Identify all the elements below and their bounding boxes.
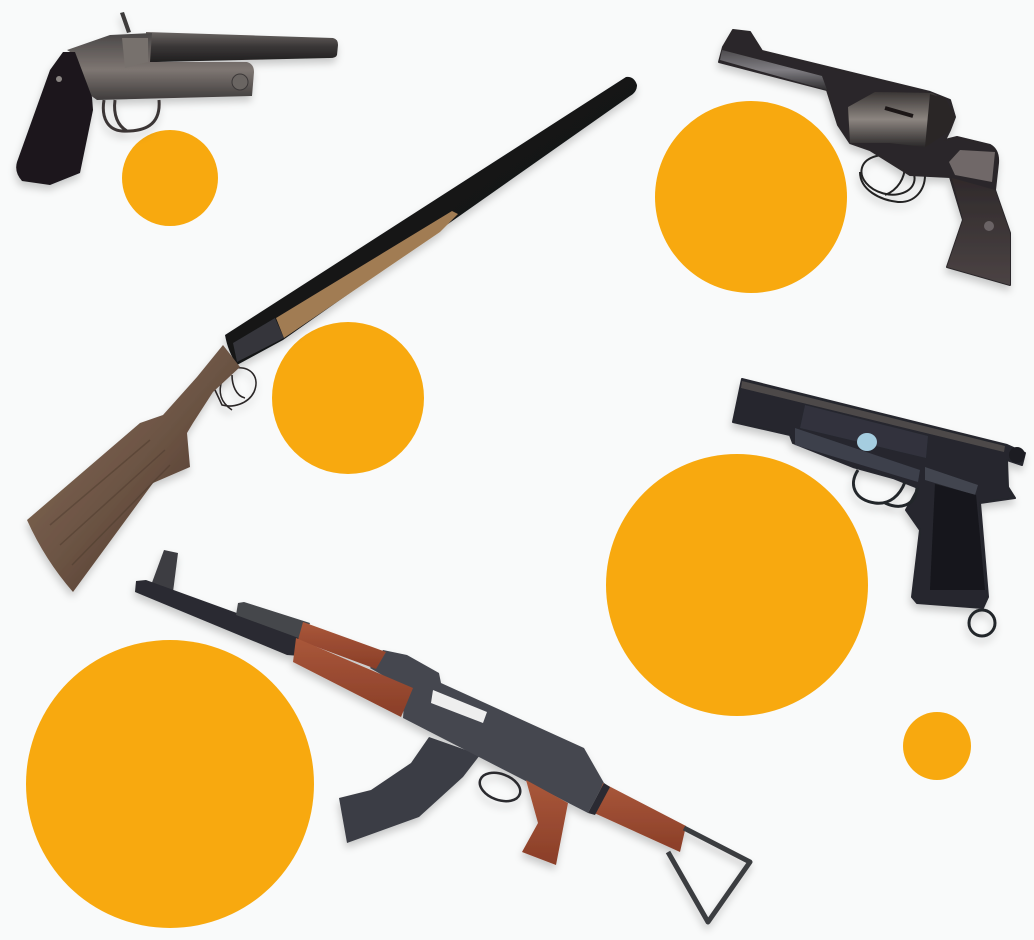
circle: assault rifle value: [26, 640, 314, 928]
icon: shotgun: [27, 77, 637, 592]
circle: revolver value: [655, 101, 847, 293]
icon: assault rifle: [135, 550, 750, 922]
circle: small value: [903, 712, 971, 780]
icon: flare pistol: [16, 12, 338, 185]
icon: revolver: [719, 30, 1010, 285]
circle: flare pistol value: [122, 130, 218, 226]
circle: semi-automatic pistol value: [606, 454, 868, 716]
icon: semi-automatic pistol: [733, 379, 1025, 636]
circle: shotgun value: [272, 322, 424, 474]
